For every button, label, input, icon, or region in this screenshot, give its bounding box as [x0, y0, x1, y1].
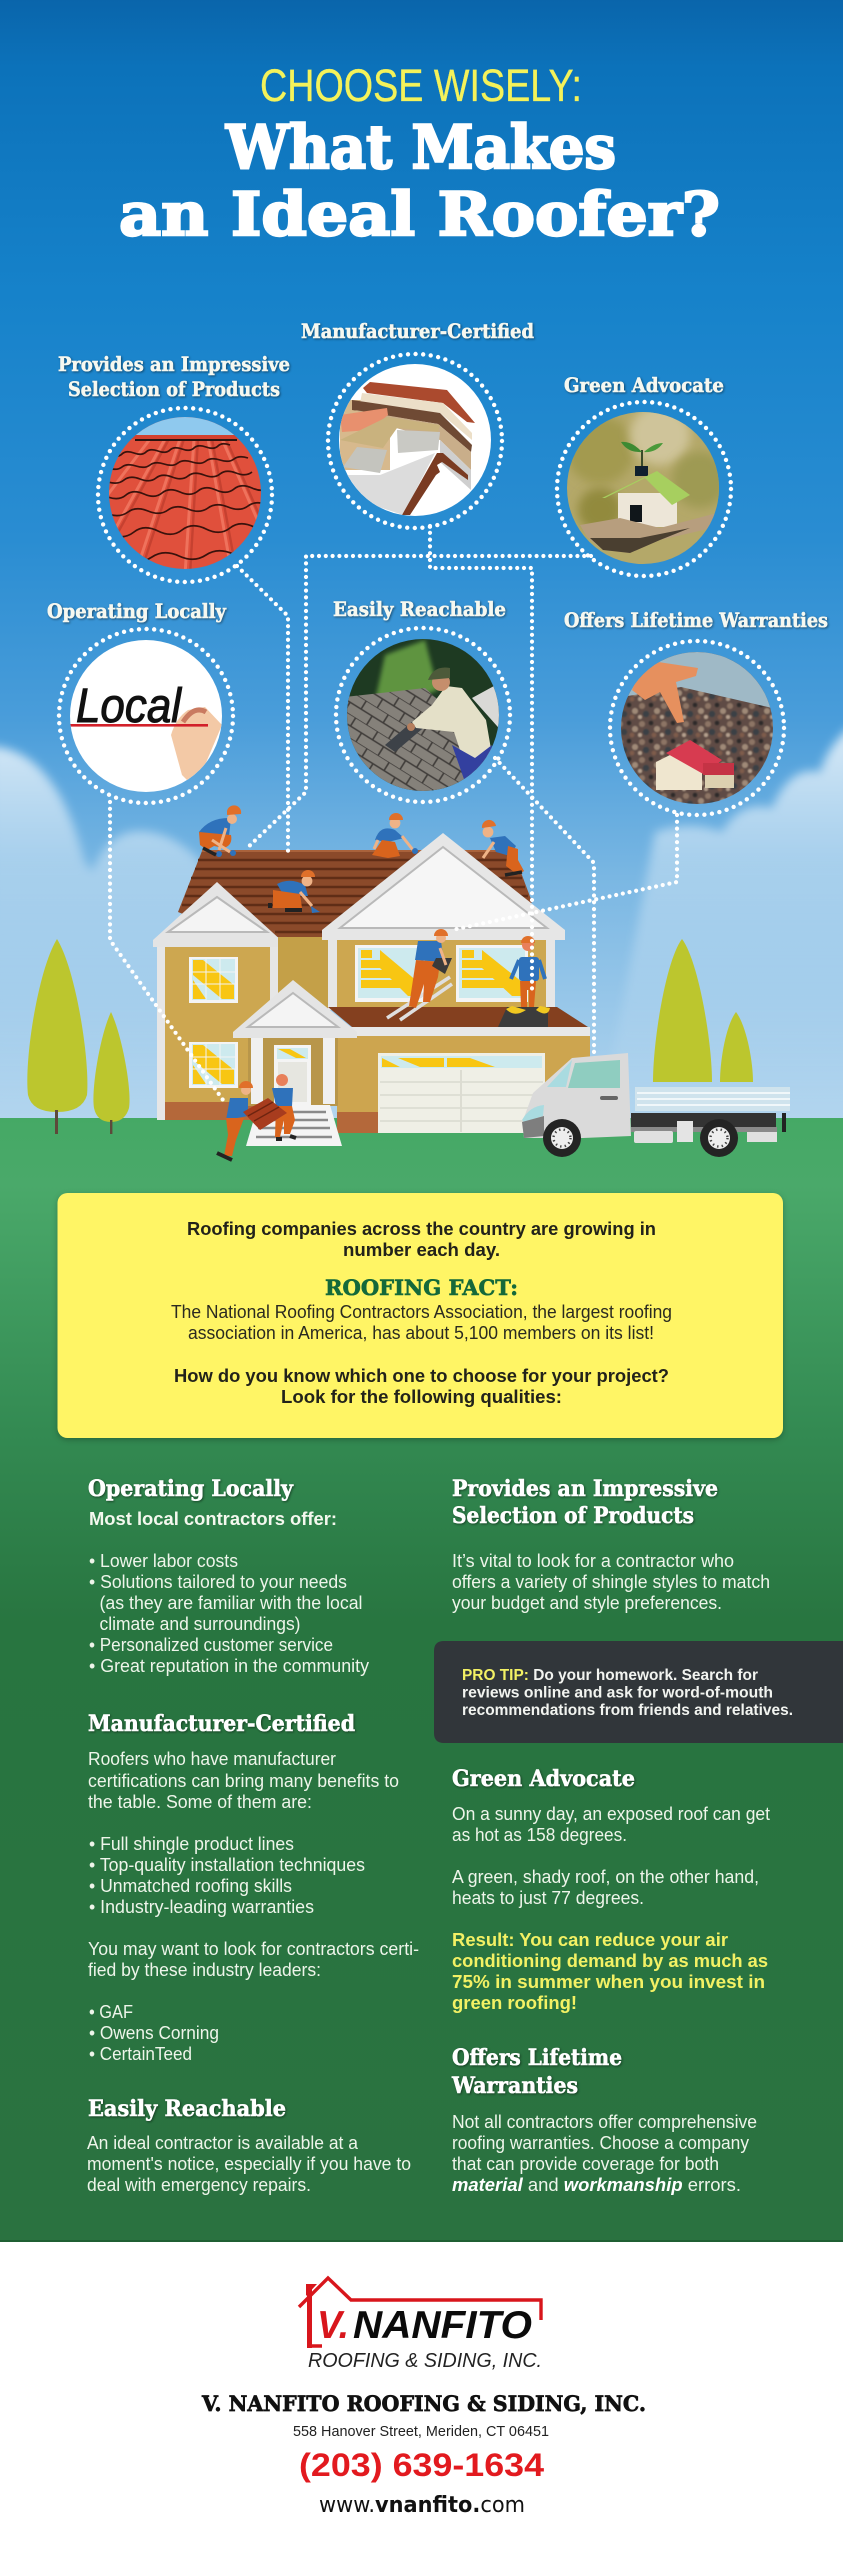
title: an Ideal Roofer?	[119, 180, 720, 250]
worker on ladder	[387, 929, 452, 1020]
section: impressive selection of products	[452, 1476, 770, 1613]
intro question	[174, 1366, 669, 1407]
section: lifetime warranties: Warranties	[451, 2073, 578, 2099]
label: manufacturer certified: Manufacturer-Certified	[301, 319, 534, 343]
title: CHOOSE WISELY:	[260, 60, 582, 111]
company logo: NANFITO	[353, 2304, 532, 2347]
roofing fact text: association in America, has about 5,100 members on its list!	[188, 1323, 654, 1343]
lower wall	[337, 1027, 590, 1133]
section: green advocate: Green Advocate	[452, 1766, 635, 1792]
worker top left	[199, 805, 241, 857]
section: lifetime warranties: roofing warranties. Choose a company	[452, 2133, 749, 2153]
trees	[27, 939, 753, 1134]
upper right wall	[328, 940, 555, 1010]
section: green advocate: conditioning demand by as much as	[452, 1951, 768, 1971]
pro tip callout: reviews online and ask for word-of-mouth	[462, 1684, 773, 1702]
section: lifetime warranties: that can provide coverage for both	[452, 2154, 719, 2174]
garage door	[378, 1053, 545, 1133]
section: manufacturer certified: Manufacturer-Certified	[88, 1711, 355, 1737]
section: lifetime warranties: Offers Lifetime	[452, 2045, 622, 2071]
company logo	[299, 2278, 542, 2372]
section: operating locally: Most local contractors offer:	[89, 1509, 337, 1529]
section: lifetime warranties: Not all contractors offer comprehensive	[452, 2112, 757, 2132]
section: easily reachable: Easily Reachable	[88, 2096, 286, 2122]
right gable	[322, 833, 565, 940]
section: manufacturer certified	[88, 1711, 419, 2064]
intro question: Look for the following qualities:	[281, 1387, 562, 1407]
title: What Makes	[225, 113, 616, 183]
title	[119, 60, 720, 250]
sky background	[0, 0, 843, 1125]
intro sentence	[187, 1219, 656, 1260]
label: easily reachable: Easily Reachable	[333, 597, 506, 621]
section: manufacturer certified: You may want to look for contractors certi-	[88, 1939, 419, 1959]
pro tip callout: PRO TIP: Do your homework. Search for	[462, 1667, 758, 1684]
dotted connector lines	[110, 526, 677, 1100]
porch steps	[246, 1105, 342, 1146]
section: manufacturer certified: • GAF	[89, 2002, 133, 2022]
ground	[0, 1118, 843, 2242]
lower roof	[328, 1007, 588, 1027]
label: operating locally: Operating Locally	[47, 599, 227, 623]
section: operating locally: climate and surroundings)	[100, 1614, 300, 1634]
website: www.vnanfito.com	[319, 2493, 525, 2518]
section: manufacturer certified: certifications can bring many benefits to	[88, 1771, 399, 1791]
company logo: V.	[317, 2304, 349, 2347]
label: provides an impressive selection: Selection of Products	[68, 377, 280, 401]
worker kneeling on roof	[270, 870, 320, 913]
section: green advocate	[452, 1766, 770, 2013]
section: green advocate: On a sunny day, an exposed roof can get	[452, 1804, 770, 1824]
section: operating locally: (as they are familiar with the local	[100, 1593, 362, 1613]
wheels	[543, 1119, 738, 1157]
section: lifetime warranties	[451, 2045, 757, 2195]
left windows	[189, 957, 238, 1088]
worker standing	[506, 936, 550, 1014]
section: lifetime warranties: material and workmanship errors.	[452, 2175, 741, 2195]
section: operating locally	[88, 1476, 369, 1676]
label: provides an impressive selection	[58, 352, 290, 401]
two workers carrying tiles	[217, 1074, 296, 1160]
section: manufacturer certified: Roofers who have manufacturer	[88, 1749, 336, 1769]
section: green advocate: green roofing!	[452, 1993, 577, 2013]
company logo: ROOFING & SIDING, INC.	[308, 2350, 542, 2372]
intro question: How do you know which one to choose for your project?	[174, 1366, 669, 1386]
section: manufacturer certified: • Unmatched roofing skills	[89, 1876, 292, 1896]
section: green advocate: 75% in summer when you invest in	[452, 1972, 765, 1992]
main roof	[178, 851, 532, 937]
section: manufacturer certified: • CertainTeed	[89, 2044, 192, 2064]
label: provides an impressive selection: Provides an Impressive	[58, 352, 290, 376]
section: operating locally: • Personalized customer service	[89, 1635, 333, 1655]
section: green advocate: as hot as 158 degrees.	[452, 1825, 627, 1845]
section: operating locally: • Great reputation in the community	[89, 1656, 369, 1676]
pro tip callout	[434, 1641, 843, 1743]
phone number: (203) 639-1634	[299, 2447, 544, 2483]
circle: roof layers cutaway	[328, 354, 502, 528]
left wing wall	[157, 940, 278, 1120]
section: impressive selection of products: offers a variety of shingle styles to match	[452, 1572, 770, 1592]
section: easily reachable: An ideal contractor is available at a	[87, 2133, 359, 2153]
yellow intro box	[58, 1193, 783, 1438]
pro tip callout: recommendations from friends and relatives.	[462, 1702, 793, 1719]
section: manufacturer certified: • Industry-leading warranties	[89, 1897, 314, 1917]
section: easily reachable: moment's notice, especially if you have to	[87, 2154, 411, 2174]
cab	[522, 1053, 631, 1138]
circle: local sign	[59, 629, 233, 803]
upper windows	[355, 945, 528, 1002]
roofing fact text: The National Roofing Contractors Association, the largest roofing	[171, 1302, 672, 1322]
circle: lifetime warranty hand and house	[610, 641, 785, 815]
section: easily reachable	[87, 2096, 411, 2195]
left gable	[153, 882, 283, 947]
section: green advocate: A green, shady roof, on the other hand,	[452, 1867, 759, 1887]
section: green advocate: Result: You can reduce your air	[452, 1930, 728, 1950]
section: green advocate: heats to just 77 degrees.	[452, 1888, 644, 1908]
truck	[522, 1053, 790, 1157]
section: manufacturer certified: • Owens Corning	[89, 2023, 219, 2043]
circle: roofer placing shingles	[336, 628, 510, 805]
clouds	[0, 725, 843, 1125]
centre wall	[278, 937, 328, 1017]
section: impressive selection of products: Selection of Products	[452, 1503, 694, 1529]
section: operating locally: Operating Locally	[88, 1476, 294, 1502]
cargo bed	[631, 1087, 790, 1143]
section: manufacturer certified: • Top-quality installation techniques	[89, 1855, 365, 1875]
address: 558 Hanover Street, Meriden, CT 06451	[293, 2423, 549, 2440]
house illustration	[153, 805, 590, 1160]
intro sentence: number each day.	[343, 1240, 500, 1260]
porch	[233, 980, 357, 1106]
section: manufacturer certified: • Full shingle product lines	[89, 1834, 294, 1854]
section: manufacturer certified: the table. Some of them are:	[88, 1792, 312, 1812]
roofing fact heading: ROOFING FACT:	[325, 1275, 518, 1300]
label: green advocate: Green Advocate	[564, 373, 724, 397]
footer panel	[0, 2240, 843, 2560]
intro sentence: Roofing companies across the country are growing in	[187, 1219, 656, 1239]
circle: local sign: Local	[76, 680, 182, 733]
section: operating locally: • Lower labor costs	[89, 1551, 238, 1571]
section: easily reachable: deal with emergency repairs.	[87, 2175, 311, 2195]
section: manufacturer certified: fied by these industry leaders:	[88, 1960, 321, 1980]
circle: red metal roof tiles	[98, 408, 279, 582]
workers	[199, 805, 550, 1160]
section: impressive selection of products: your budget and style preferences.	[452, 1593, 722, 1613]
section: impressive selection of products: It’s vital to look for a contractor who	[452, 1551, 734, 1571]
circle: green house in hand	[557, 402, 731, 576]
worker top middle	[372, 813, 418, 858]
section: impressive selection of products: Provides an Impressive	[452, 1476, 718, 1502]
roofing fact text	[171, 1302, 672, 1343]
worker top right	[482, 820, 524, 875]
company name: V. NANFITO ROOFING & SIDING, INC.	[201, 2391, 646, 2416]
section: operating locally: • Solutions tailored to your needs	[89, 1572, 347, 1592]
